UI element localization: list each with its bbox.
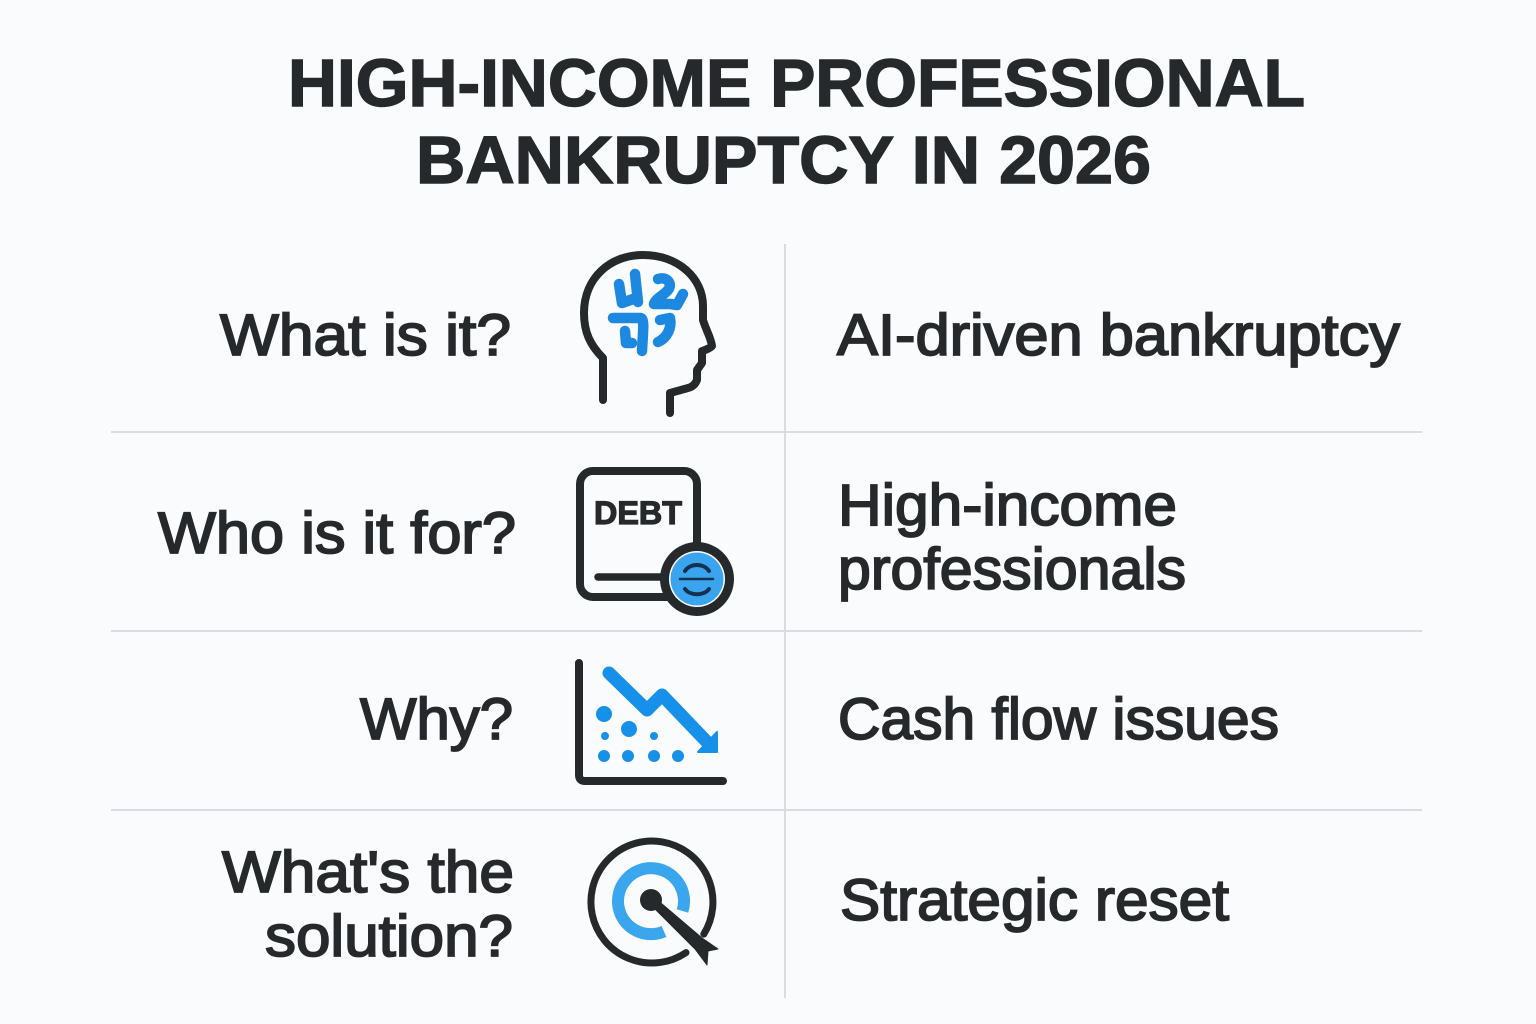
label: What's the solution?: solution? [265, 904, 513, 969]
answer: High-income professionals: High-income [838, 473, 1177, 538]
title: HIGH-INCOME PROFESSIONAL [288, 46, 1305, 121]
icon: head with numbers [584, 255, 712, 413]
label: What's the solution? [222, 840, 514, 969]
label: Who is it for?: Who is it for? [158, 501, 516, 566]
answer: Cash flow issues: Cash flow issues [838, 687, 1279, 752]
icon: falling chart [579, 663, 723, 781]
answer: AI-driven bankruptcy: AI-driven bankruptcy [837, 303, 1400, 368]
answer: High-income professionals: professionals [838, 537, 1186, 602]
label: What's the solution?: What's the [222, 840, 514, 905]
title [288, 46, 1305, 198]
answer: Strategic reset: Strategic reset [840, 868, 1229, 933]
icon: debt document with coin [580, 471, 734, 616]
label: Why?: Why? [360, 687, 513, 752]
answer: High-income professionals [838, 473, 1186, 602]
title: BANKRUPTCY IN 2026 [416, 123, 1151, 198]
icon: debt document with coin: DEBT [594, 495, 682, 531]
label: What is it?: What is it? [220, 303, 511, 368]
icon: target with dart [591, 841, 718, 965]
